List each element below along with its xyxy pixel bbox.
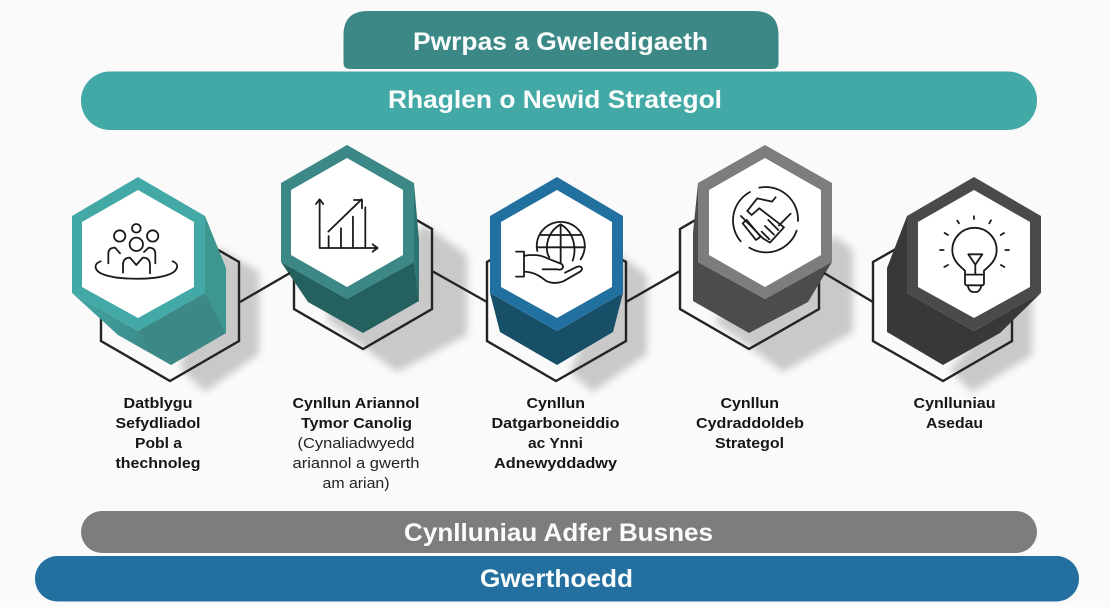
- label: step 1: Pobl a: [135, 435, 183, 452]
- connector lines between steps: [240, 271, 873, 302]
- icon: light bulb: [940, 216, 1009, 292]
- icon: people around a table: [96, 224, 177, 279]
- label: step 4: Cydraddoldeb: [696, 415, 804, 432]
- banner: Pwrpas a Gweledigaeth: Pwrpas a Gweledigaeth: [413, 28, 708, 56]
- label: step 1: Sefydliadol: [116, 415, 200, 432]
- step 1 hexagon: people: [72, 177, 259, 392]
- step 2 hexagon: chart: [281, 145, 467, 372]
- icon: rising bar chart: [316, 199, 378, 252]
- label: step 2: ariannol a gwerth: [292, 455, 420, 472]
- banner: Cynlluniau Adfer Busnes: [81, 511, 1037, 553]
- banner: Cynlluniau Adfer Busnes: Cynlluniau Adfer Busnes: [404, 519, 713, 547]
- label: step 4: [696, 395, 804, 452]
- label: step 3: ac Ynni: [528, 435, 583, 452]
- step 4 hexagon: handshake: [680, 145, 853, 372]
- label: step 2: am arian): [322, 475, 390, 492]
- label: step 3: [492, 395, 620, 472]
- label: step 3: Cynllun: [526, 395, 585, 412]
- icon: handshake in a circle: [733, 187, 798, 252]
- label: step 4: Strategol: [715, 435, 784, 452]
- label: step 3: Datgarboneiddio: [492, 415, 620, 432]
- banner: Rhaglen o Newid Strategol: [81, 72, 1037, 130]
- banner: Gwerthoedd: Gwerthoedd: [480, 565, 633, 593]
- banner: Pwrpas a Gweledigaeth: [344, 11, 778, 69]
- banner: Rhaglen o Newid Strategol: Rhaglen o Newid Strategol: [388, 86, 722, 114]
- label: step 5: Cynlluniau: [914, 395, 996, 412]
- label: step 2: Cynllun Ariannol: [292, 395, 420, 412]
- label: step 4: Cynllun: [720, 395, 779, 412]
- label: step 1: thechnoleg: [116, 455, 200, 472]
- step 3 hexagon: globe in hand: [487, 177, 647, 392]
- label: step 2: Tymor Canolig: [301, 415, 412, 432]
- step 5 hexagon: light bulb: [873, 177, 1041, 392]
- label: step 5: [914, 395, 996, 432]
- label: step 1: Datblygu: [124, 395, 192, 412]
- banner: Gwerthoedd: [35, 556, 1079, 602]
- label: step 2: [292, 395, 420, 492]
- label: step 5: Asedau: [926, 415, 983, 432]
- label: step 1: [116, 395, 200, 472]
- icon: globe held in hand: [516, 222, 585, 283]
- label: step 3: Adnewyddadwy: [494, 455, 618, 472]
- label: step 2: (Cynaliadwyedd: [298, 435, 414, 452]
